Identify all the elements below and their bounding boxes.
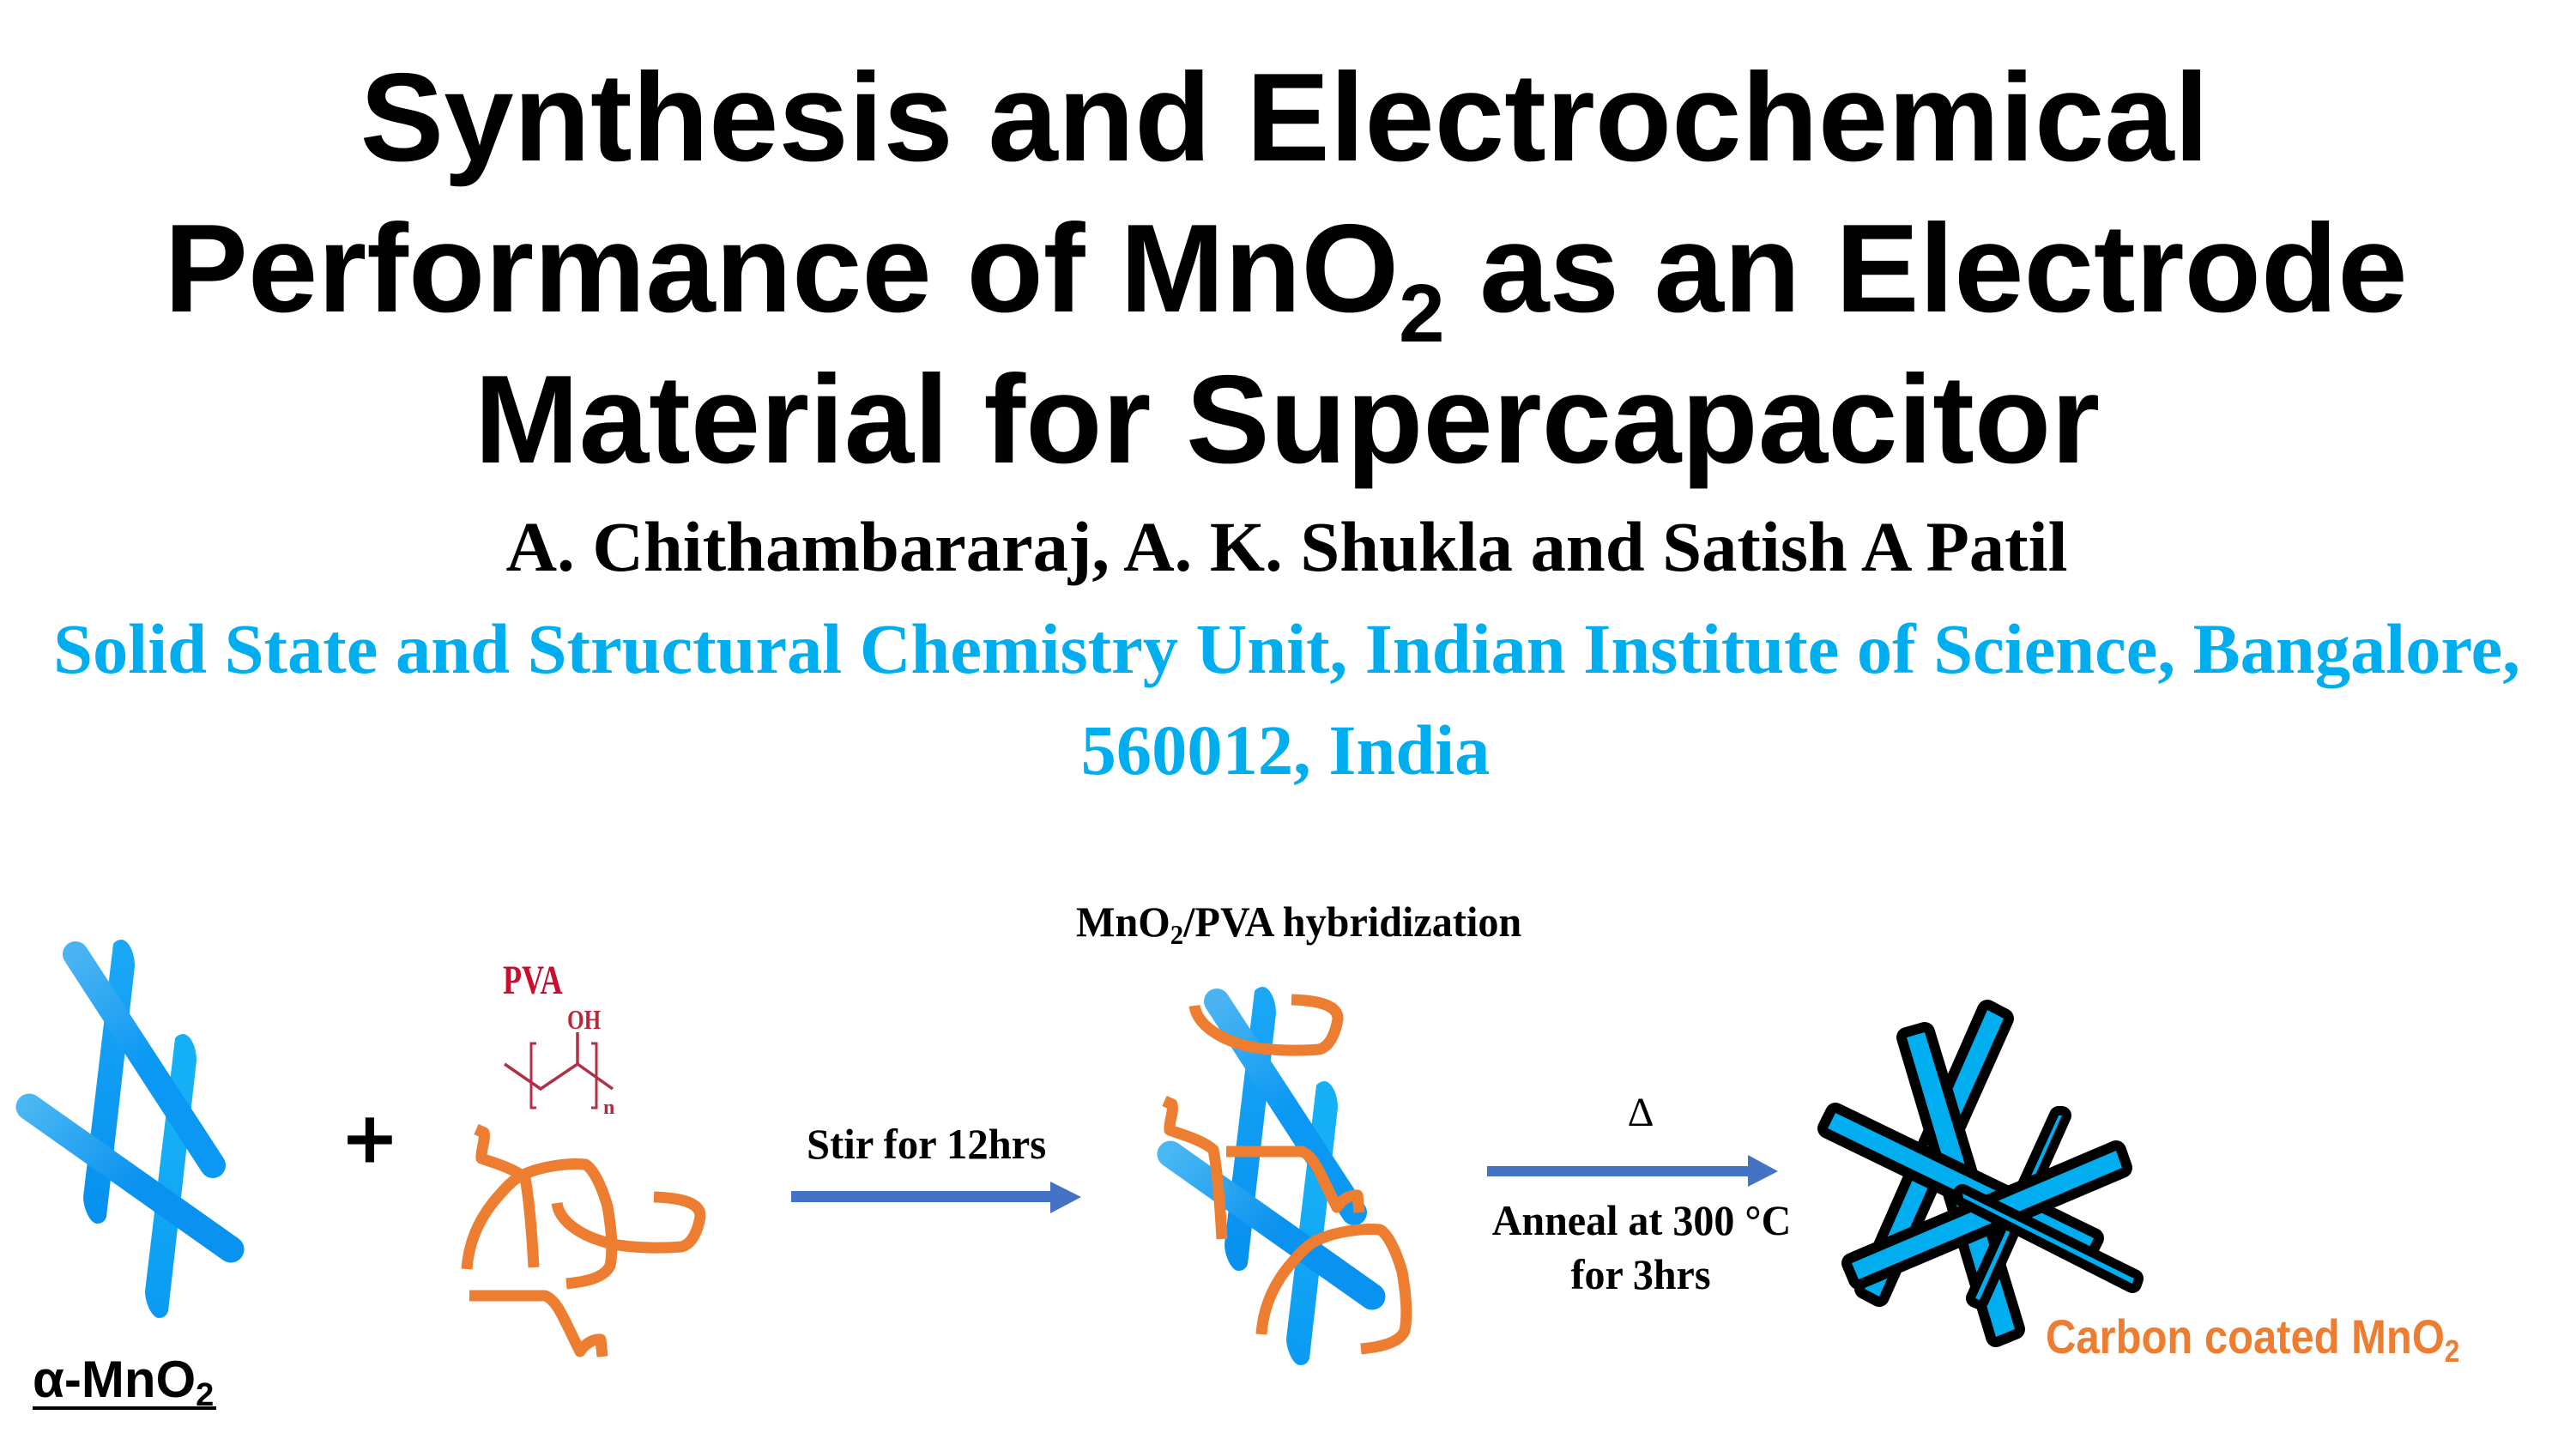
PVA chemical structure: OH: [567, 1005, 601, 1036]
title: Material for Supercapacitor: [475, 350, 2100, 490]
authors: A. Chithambararaj, A. K. Shukla and Satish A Patil: [506, 507, 2068, 586]
arrow: stirring step: [791, 1182, 1081, 1213]
title: 2: [1399, 268, 1445, 360]
label: alpha-MnO2: 2: [196, 1377, 214, 1413]
title: Synthesis and Electrochemical: [360, 48, 2209, 188]
icon: carbon coated MnO2 rods: [1828, 1010, 2134, 1337]
label: carbon coated MnO2: Carbon coated MnO: [2046, 1310, 2445, 1364]
affiliation: 560012, India: [1081, 710, 1490, 789]
label: MnO2/PVA hybridization: 2: [1170, 919, 1183, 950]
label: MnO2/PVA hybridization: /PVA hybridization: [1182, 898, 1521, 946]
affiliation: Solid State and Structural Chemistry Unit, Indian Institute of Science, Bangalore,: [53, 609, 2520, 688]
title: Performance of MnO: [164, 199, 1399, 339]
plus sign: +: [345, 1091, 395, 1188]
label: anneal conditions: [1492, 1196, 1791, 1298]
label: alpha-MnO2: α-MnO: [33, 1351, 196, 1408]
icon: PVA polymer strands: [467, 1129, 700, 1357]
arrow: anneal step: [1487, 1155, 1778, 1187]
label: anneal conditions: Anneal at 300 °C: [1492, 1196, 1791, 1244]
label: carbon coated MnO2: 2: [2445, 1334, 2459, 1369]
label: stir for 12hrs: Stir for 12hrs: [807, 1120, 1046, 1168]
title: as an Electrode: [1445, 199, 2408, 339]
PVA chemical structure: [503, 958, 614, 1119]
label: delta: Δ: [1628, 1090, 1654, 1135]
title: [164, 48, 2408, 490]
PVA chemical structure: PVA: [503, 958, 563, 1003]
affiliation: [53, 609, 2520, 789]
icon: MnO2/PVA hybrid: [1164, 987, 1406, 1365]
label: MnO2/PVA hybridization: MnO: [1076, 898, 1170, 946]
PVA chemical structure: n: [603, 1097, 614, 1119]
label: anneal conditions: for 3hrs: [1570, 1250, 1711, 1298]
icon: alpha-MnO2 nanorods: [29, 940, 231, 1318]
